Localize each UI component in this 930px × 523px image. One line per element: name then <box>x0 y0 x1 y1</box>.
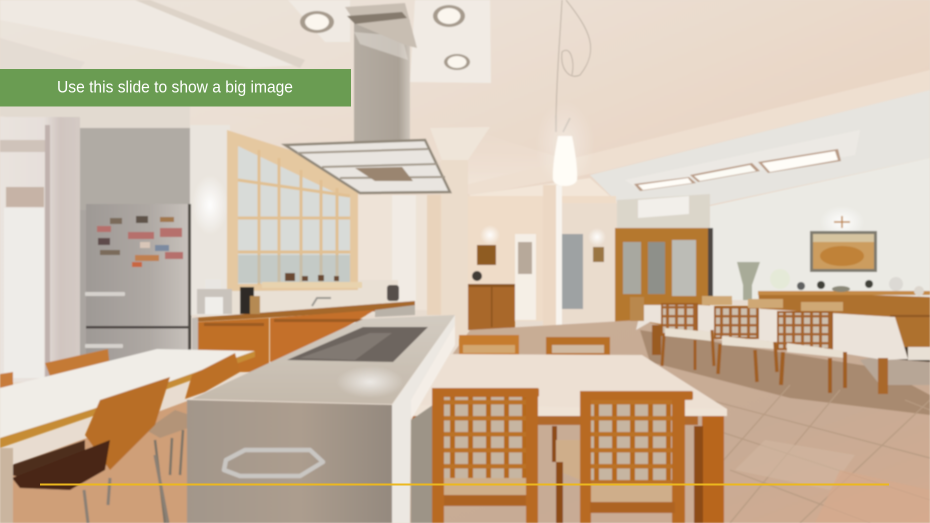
center dining table <box>408 354 727 523</box>
glass display cabinet <box>615 228 713 326</box>
sideboard with decor <box>737 262 930 362</box>
stainless kitchen island <box>187 315 455 523</box>
countertop appliances <box>197 279 399 315</box>
recessed spotlights <box>288 0 491 83</box>
left dining table and chairs <box>0 349 255 523</box>
classical column <box>427 127 562 338</box>
island handle <box>224 450 323 476</box>
accent line <box>40 484 889 486</box>
title banner <box>0 69 351 106</box>
dining chairs <box>630 296 845 393</box>
kitchen back wall with column <box>190 125 429 315</box>
kitchen counter and lower cabinets <box>192 301 415 372</box>
front chair left <box>432 388 539 523</box>
far chairs at center table <box>459 335 610 357</box>
ceiling <box>0 0 930 210</box>
front chair right <box>552 391 693 523</box>
stainless refrigerator with magnets <box>85 204 191 362</box>
back wall, doors and column <box>429 196 617 330</box>
pendant lamp <box>535 0 595 189</box>
glass cabinet window <box>227 130 362 291</box>
left wall and curtain <box>0 117 191 382</box>
dining table with tablecloth <box>636 305 930 394</box>
floor tiles <box>0 320 930 523</box>
range hood <box>285 3 450 193</box>
ceiling light panels <box>625 130 860 191</box>
banner title text: Use this slide to show a big image <box>57 78 293 96</box>
framed painting <box>810 231 877 272</box>
right wall <box>617 158 930 300</box>
